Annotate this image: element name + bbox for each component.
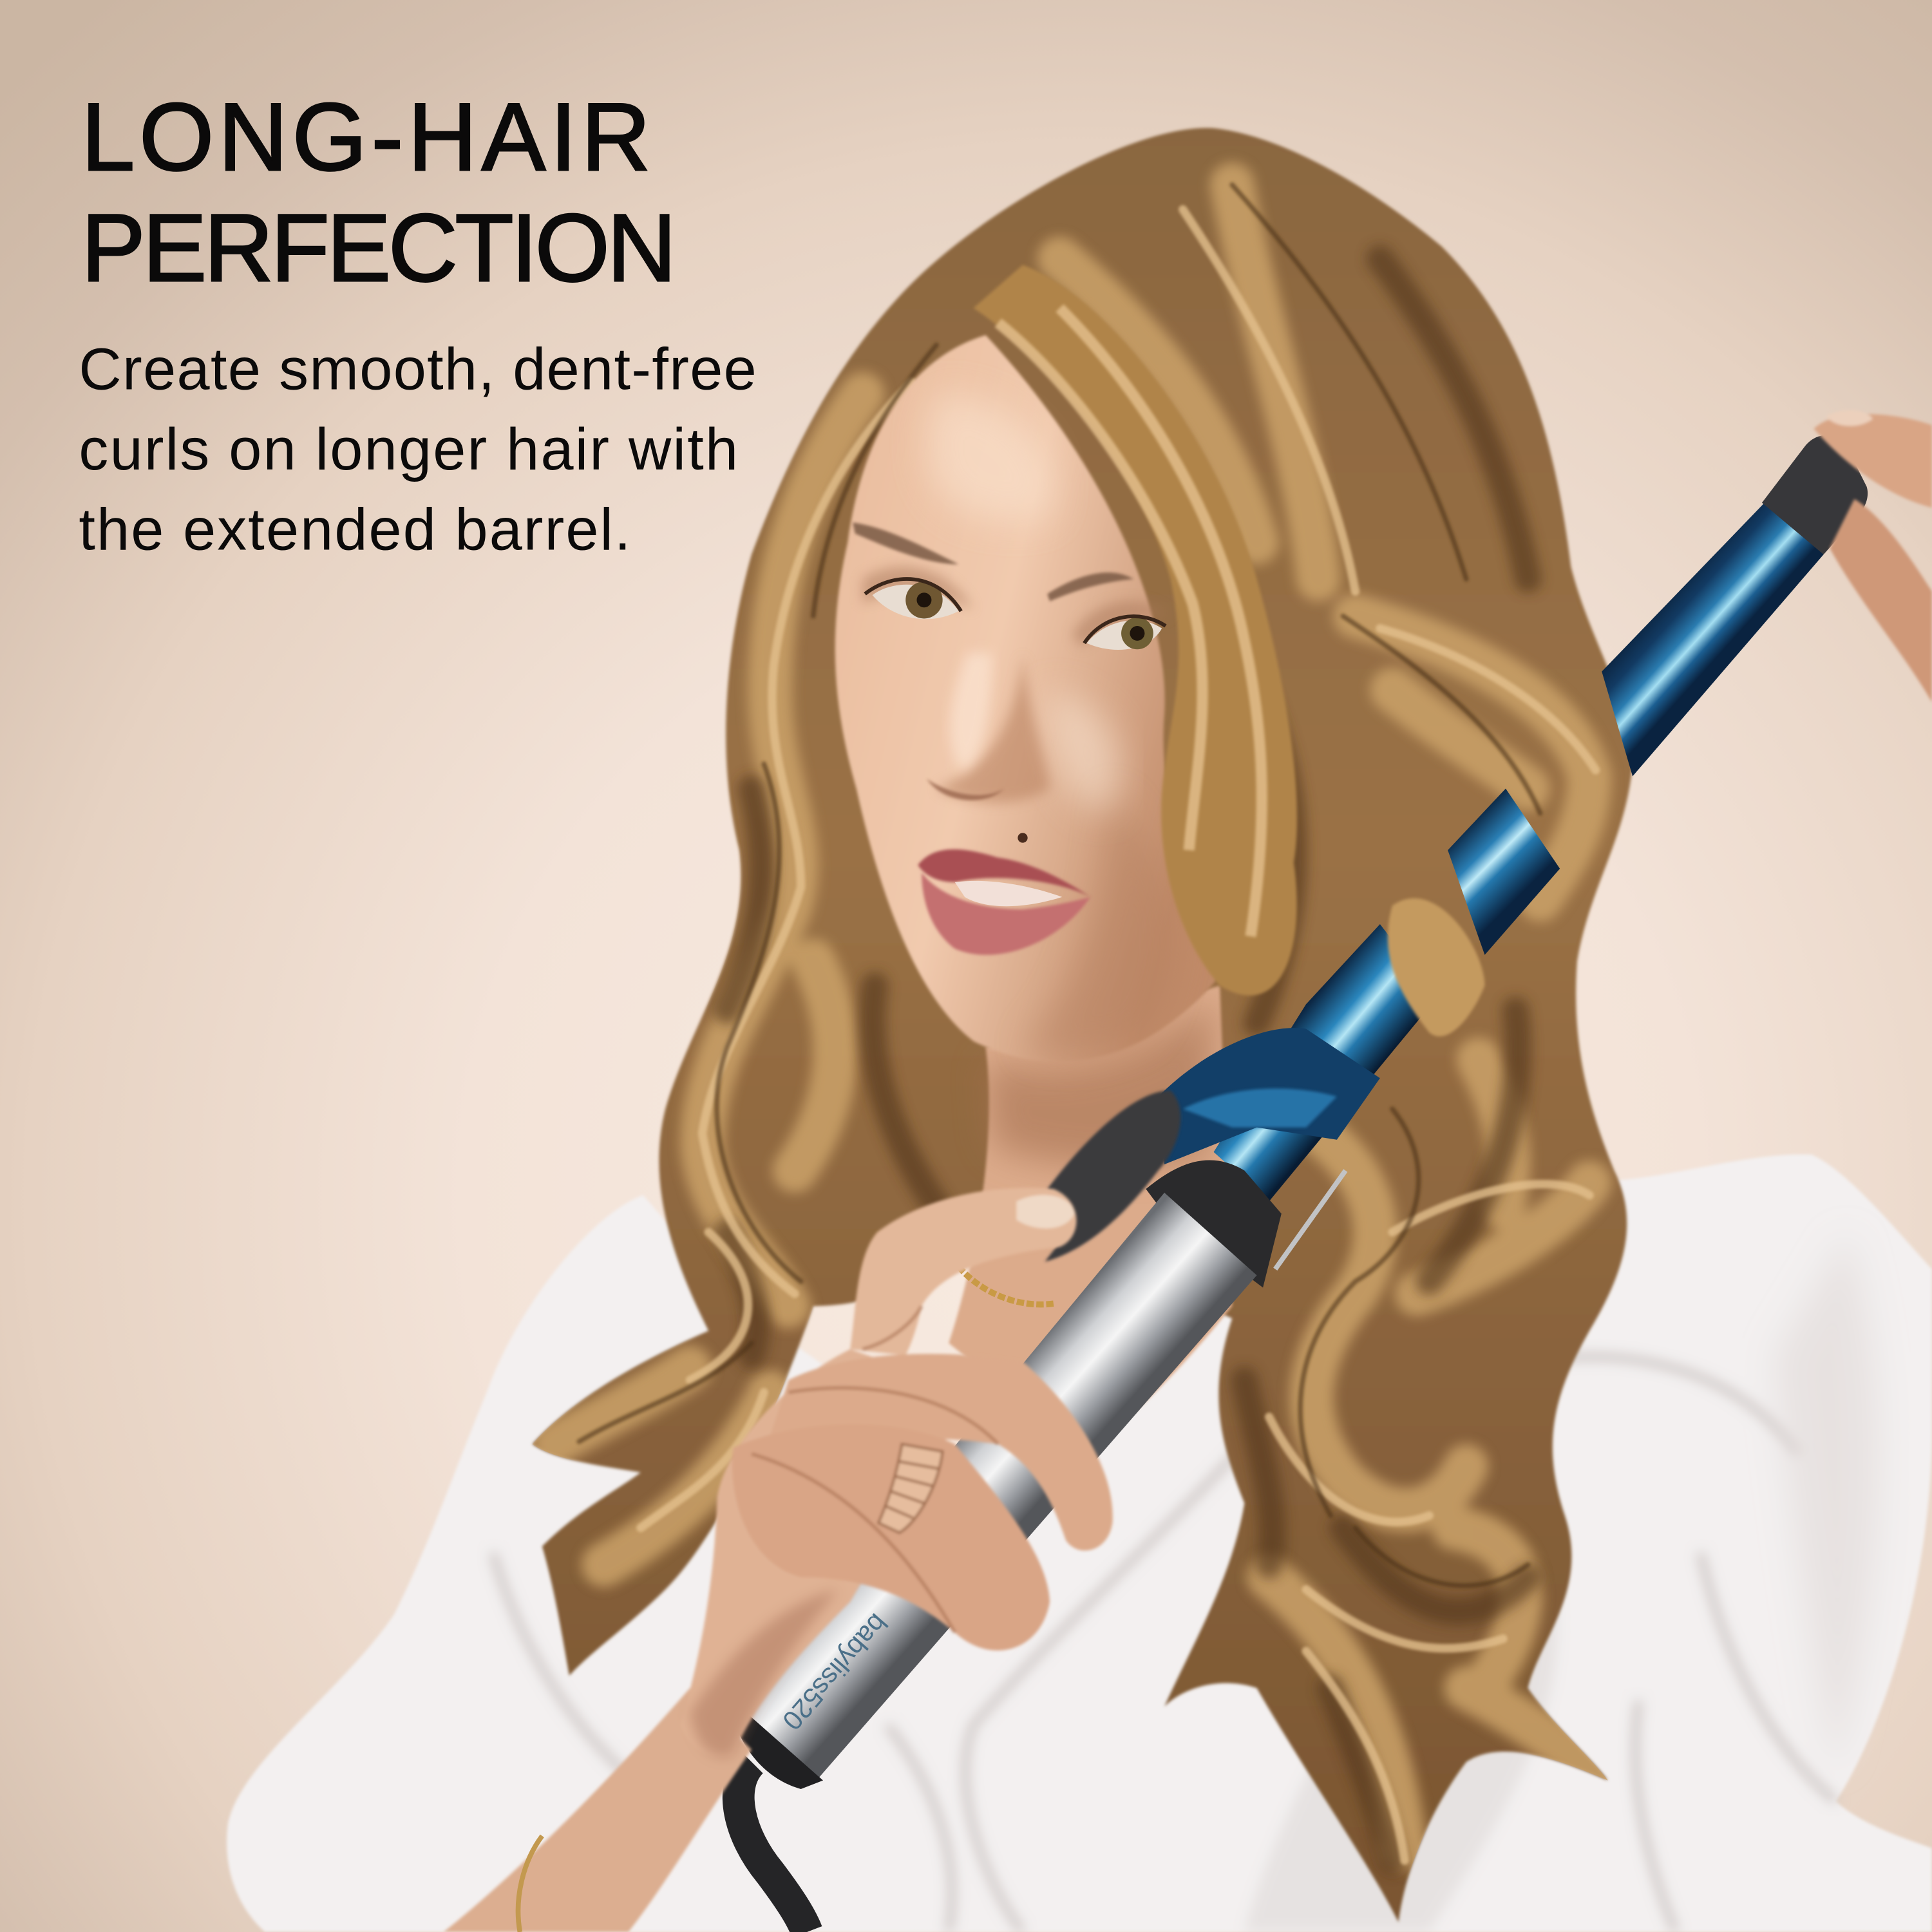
- eye shadows: [862, 567, 1171, 647]
- finger creases: [752, 1306, 998, 1633]
- hand on handle: [444, 1188, 1113, 1932]
- hair silhouette: [533, 128, 1633, 1922]
- hand shadow: [690, 1589, 838, 1757]
- blue clamp: [1158, 1028, 1380, 1164]
- power cord: [739, 1762, 807, 1932]
- blue barrel middle: [1448, 788, 1560, 955]
- forearm: [444, 1688, 752, 1932]
- neck and chest: [949, 986, 1232, 1454]
- eyes: [873, 585, 1162, 650]
- clamp highlight: [1183, 1088, 1337, 1128]
- wire stand: [1275, 1171, 1345, 1269]
- nose: [936, 653, 1050, 802]
- lips: [918, 849, 1090, 897]
- beauty mark: [1018, 833, 1028, 843]
- curling iron: [733, 435, 1868, 1932]
- fingers holding iron tip: [1814, 410, 1932, 703]
- description text: the extended barrel.: [79, 497, 631, 562]
- fine blond strands: [641, 209, 1596, 1861]
- title: PERFECTION: [81, 194, 676, 301]
- black collar: [1146, 1160, 1282, 1287]
- hair lock around barrel: [1388, 898, 1484, 1036]
- bracelet: [518, 1836, 542, 1932]
- palm: [680, 1349, 973, 1757]
- description text: Create smooth, dent-free: [79, 337, 757, 402]
- middle finger: [764, 1354, 1113, 1551]
- brand text on handle: babyliss520: [777, 1608, 893, 1736]
- neck shadow: [986, 998, 1214, 1166]
- handle end cap: [733, 1707, 823, 1789]
- hair over forehead: [973, 265, 1297, 996]
- index finger: [850, 1188, 1077, 1356]
- gold ring: [878, 1444, 943, 1533]
- title: LONG-HAIR: [81, 83, 650, 191]
- fingernail: [1016, 1195, 1074, 1228]
- broad dark waves: [727, 259, 1528, 1861]
- title: [81, 83, 676, 301]
- description text: curls on longer hair with: [79, 417, 738, 482]
- blue barrel lower: [1214, 924, 1437, 1201]
- eyebrows: [853, 522, 1133, 601]
- gold necklace: [959, 1267, 1054, 1305]
- fine dark strands: [579, 185, 1540, 1586]
- silver handle: [739, 1193, 1257, 1784]
- clamp handle: [1045, 1090, 1180, 1262]
- broad highlight waves: [554, 185, 1602, 1848]
- white shirt: [227, 1154, 1932, 1932]
- ring finger: [732, 1424, 1050, 1651]
- face: [835, 265, 1297, 1061]
- hair ribbons: [554, 185, 1602, 1861]
- description text: [79, 337, 757, 562]
- blue barrel upper: [1602, 499, 1824, 776]
- black tip: [1762, 435, 1868, 554]
